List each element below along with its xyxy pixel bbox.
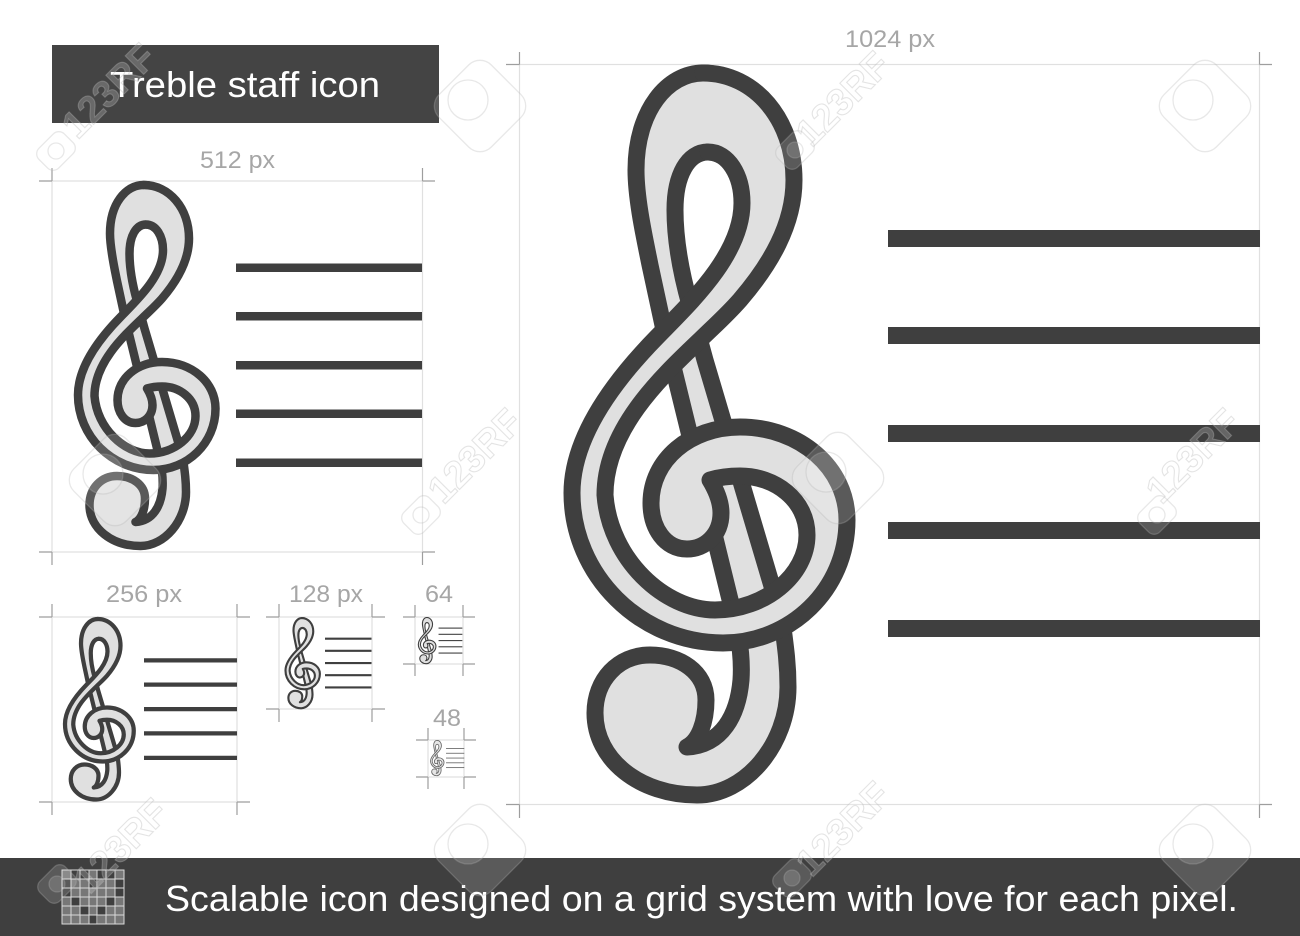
title banner — [52, 45, 439, 123]
title banner: Treble staff icon — [110, 64, 380, 105]
watermark stamps: 123RF — [788, 44, 899, 155]
icon: pixel grid — [62, 870, 124, 924]
icon: treble staff 48 px — [431, 740, 464, 776]
watermark stamps: 123RF — [420, 401, 531, 512]
128 px frame — [266, 604, 385, 722]
icon: treble staff 1024 px — [572, 73, 1260, 795]
watermark stamps: 123RF — [1138, 401, 1249, 512]
512 px label: 512 px — [200, 147, 275, 174]
256 px frame — [39, 604, 250, 815]
watermark stamps: 123RF — [54, 36, 165, 147]
1024 px label: 1024 px — [845, 26, 935, 53]
256 px label: 256 px — [106, 581, 182, 608]
icon: treble staff 128 px — [286, 618, 372, 708]
icon: treble staff 512 px — [78, 185, 422, 546]
48 px label: 48 — [433, 705, 461, 732]
64 px label: 64 — [425, 581, 453, 608]
footer text: Scalable icon designed on a grid system with love for each pixel. — [165, 878, 1238, 919]
watermark stamps: 123RF — [788, 774, 899, 885]
footer bar — [0, 858, 1300, 936]
64 px frame — [403, 605, 475, 676]
1024 px frame — [506, 52, 1272, 818]
128 px label: 128 px — [289, 581, 363, 608]
icon: treble staff 64 px — [418, 618, 462, 664]
watermark stamps: 123RF — [66, 791, 177, 902]
icon: treble staff 256 px — [65, 619, 237, 800]
512 px frame — [39, 168, 435, 565]
48 px frame — [416, 728, 476, 789]
